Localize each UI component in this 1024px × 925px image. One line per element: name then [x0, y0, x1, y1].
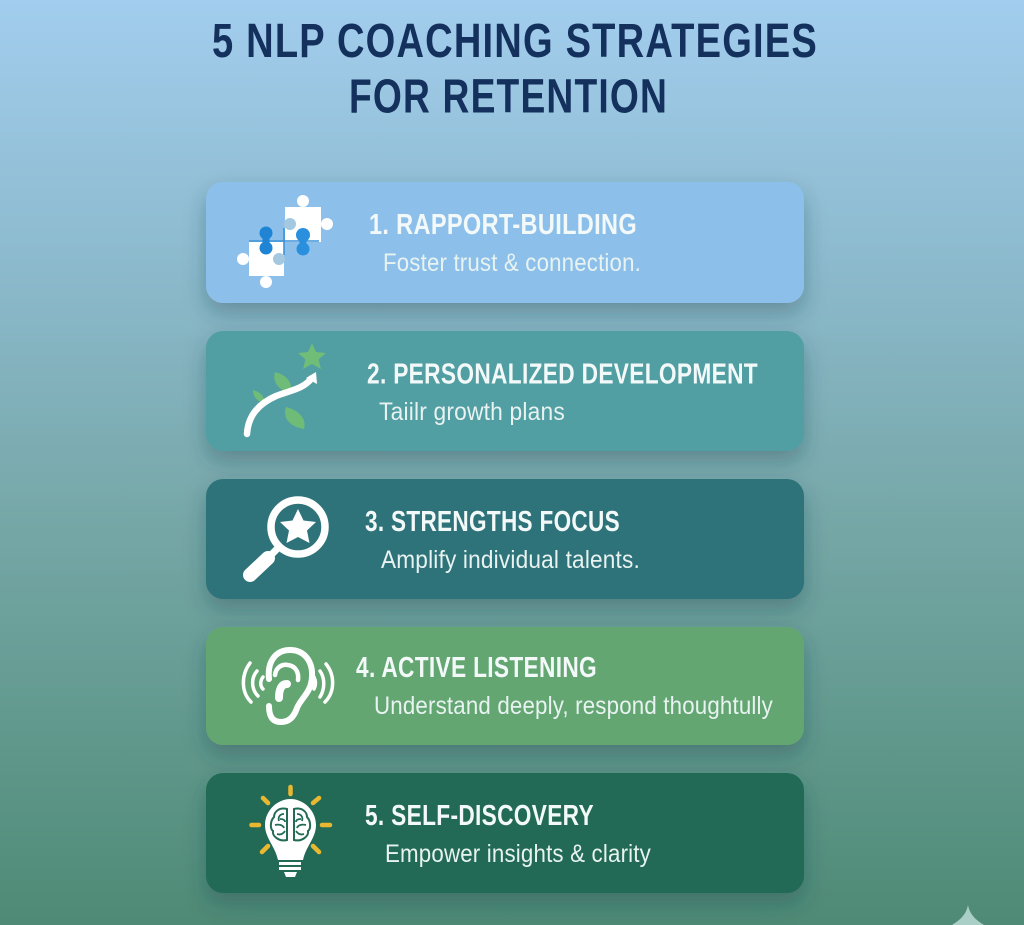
icon: magnifier with star [250, 500, 325, 575]
title: 5 NLP COACHING STRATEGIES [212, 15, 818, 68]
heading: self-discovery: 5. SELF-DISCOVERY [365, 800, 594, 832]
panel: active listening [206, 627, 804, 745]
icon: growth arrow with leaves and star [247, 343, 326, 434]
heading: active listening: 4. ACTIVE LISTENING [356, 652, 597, 684]
text: active listening description: Understand deeply, respond thoughtully [374, 692, 773, 720]
panel: personalized development [206, 331, 804, 451]
corner mark [952, 905, 984, 925]
heading: rapport-building: 1. RAPPORT-BUILDING [369, 209, 637, 241]
text: self-discovery description: Empower insights & clarity [385, 840, 651, 868]
panel: self-discovery [206, 773, 804, 893]
panel: strengths focus [206, 479, 804, 599]
text: strengths focus description: Amplify individual talents. [381, 546, 640, 574]
heading: strengths focus: 3. STRENGTHS FOCUS [365, 506, 620, 538]
title: FOR RETENTION [349, 70, 668, 124]
panel: rapport-building [206, 182, 804, 303]
text: personalized development description: Taiilr growth plans [379, 398, 565, 426]
icon: light bulb with brain [252, 787, 330, 877]
text: rapport-building description: Foster trust & connection. [383, 249, 641, 277]
heading: personalized development: 2. PERSONALIZED DEVELOPMENT [367, 358, 758, 390]
icon: ear with sound waves [243, 650, 333, 722]
icon: puzzle pieces [237, 195, 333, 288]
title [212, 15, 818, 124]
